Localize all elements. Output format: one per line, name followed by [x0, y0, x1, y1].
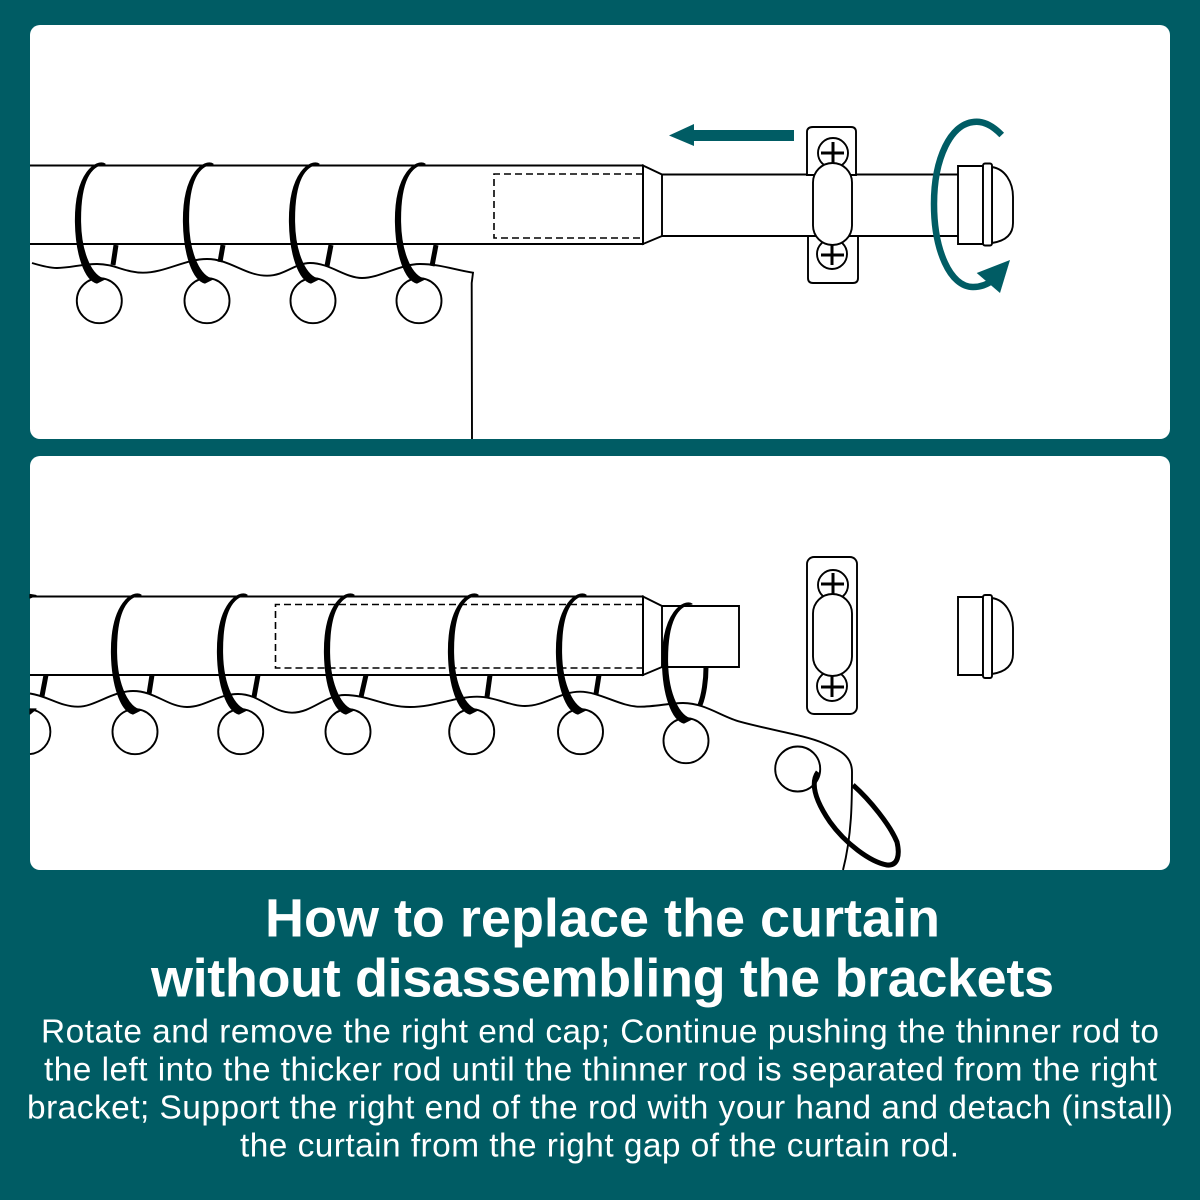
description text: bracket; Support the right end of the rod with your hand and detach (install) [27, 1090, 1173, 1127]
curtain ring back segments [42, 667, 706, 705]
curtain grommet circles [77, 278, 442, 323]
title [150, 889, 1054, 1009]
rod taper joint [643, 166, 662, 244]
bracket [807, 127, 858, 283]
description text [27, 1014, 1173, 1165]
rod taper joint [643, 596, 662, 675]
thinner rod [662, 174, 958, 236]
panel: rod assembled with end cap being removed [30, 25, 1170, 439]
hidden thinner rod dashed outline [494, 174, 643, 238]
thicker curtain rod [30, 166, 643, 244]
curtain grommet circles [30, 709, 820, 792]
push left arrow [669, 124, 794, 146]
thicker curtain rod [30, 596, 643, 675]
title: without disassembling the brackets [150, 949, 1054, 1009]
thinner rod end [662, 606, 739, 667]
curtain top edge [32, 259, 473, 439]
curtain rings [30, 594, 692, 723]
rotation arrow [934, 122, 1010, 293]
panel: thinner rod separated from bracket and curtain detached [30, 456, 1170, 870]
panel background [30, 25, 1170, 439]
curtain top edge [30, 691, 852, 870]
title: How to replace the curtain [265, 889, 940, 949]
curtain ring back segments [113, 245, 436, 266]
detached curtain ring [814, 772, 898, 865]
curtain rings [75, 163, 425, 283]
bracket [807, 557, 857, 714]
description text: the curtain from the right gap of the curtain rod. [240, 1128, 959, 1165]
rotating end cap [958, 164, 1013, 246]
removed end cap [958, 595, 1013, 678]
hidden thinner rod dashed outline [276, 604, 643, 668]
description text: Rotate and remove the right end cap; Continue pushing the thinner rod to [41, 1014, 1159, 1051]
description text: the left into the thicker rod until the thinner rod is separated from the right [44, 1052, 1158, 1089]
panel background [30, 456, 1170, 870]
